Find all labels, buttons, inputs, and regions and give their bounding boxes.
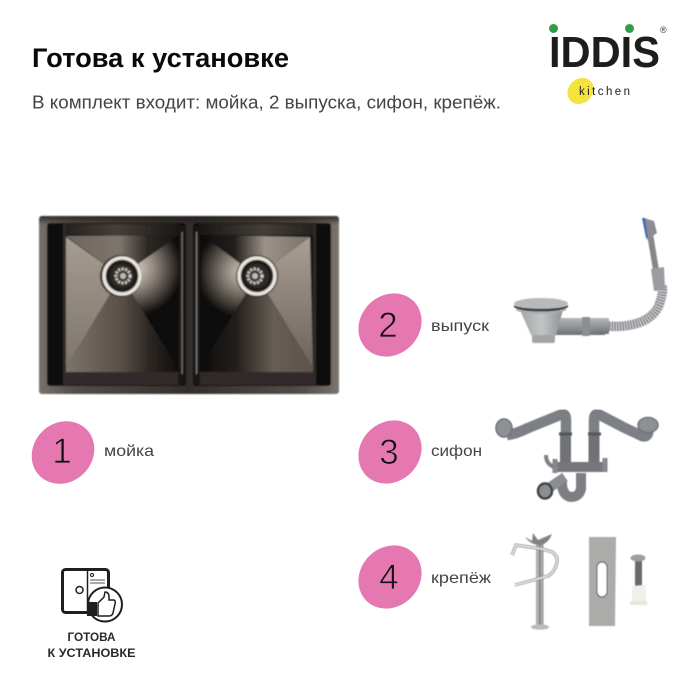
logo green dots	[549, 24, 634, 33]
left bowl	[47, 223, 186, 386]
trap	[562, 473, 581, 497]
right bowl	[193, 223, 331, 386]
logo yellow blob	[562, 73, 599, 109]
title: Готова к установке	[32, 43, 289, 73]
badge caption: ГОТОВА	[68, 630, 116, 644]
item 3: badge: 3	[379, 433, 399, 472]
left drain	[100, 255, 142, 297]
item 4: badge	[345, 532, 435, 622]
overflow cap	[644, 218, 657, 240]
icon: thumbs-up circle	[88, 588, 122, 622]
right inlet	[638, 418, 658, 432]
icon: sink outline	[62, 570, 108, 612]
item 2: label: выпуск	[431, 318, 490, 335]
item 4: label: крепёж	[431, 570, 491, 587]
overflow hose	[606, 285, 662, 326]
cross pipe	[554, 462, 606, 472]
outlet pipe	[555, 318, 605, 335]
right arm	[594, 414, 648, 436]
item 3: badge	[345, 407, 435, 497]
ready to install badge	[48, 570, 136, 660]
bolt	[536, 541, 544, 626]
ready to install badge: К УСТАНОВКЕ	[48, 646, 136, 660]
metal plate	[589, 537, 616, 626]
logo: IDDIS kitchen	[549, 24, 667, 109]
item 1: badge: 1	[52, 432, 72, 471]
strainer body	[520, 310, 563, 337]
item 1: badge	[19, 408, 107, 497]
mounting hardware image	[512, 533, 647, 630]
overflow tube	[650, 234, 656, 270]
left arm	[507, 414, 566, 436]
drain assembly image	[514, 218, 665, 343]
vertical pipes	[566, 432, 594, 464]
icon: sink with thumbs up	[62, 570, 122, 622]
item 2: badge	[345, 280, 435, 370]
subtitle: В комплект входит: мойка, 2 выпуска, сифон, крепёж.	[32, 92, 501, 112]
logo wordmark: IDDIS	[549, 28, 660, 77]
clip top	[525, 533, 552, 545]
left inlet	[496, 419, 512, 437]
bolt head	[531, 624, 549, 630]
right drain	[236, 255, 278, 297]
wire clamp	[512, 545, 557, 585]
logo registered mark: ®	[660, 25, 667, 35]
item 1: label: мойка	[104, 443, 154, 460]
item 4: badge: 4	[379, 558, 399, 597]
item 2: badge: 2	[378, 306, 398, 345]
sink image	[39, 216, 339, 394]
siphon image	[496, 414, 658, 498]
item 3: label: сифон	[431, 443, 482, 460]
drain outlet	[546, 477, 565, 490]
screw	[630, 554, 647, 605]
logo kitchen word: kitchen	[579, 86, 630, 98]
sink rim	[39, 216, 339, 394]
strainer rim	[514, 298, 568, 309]
